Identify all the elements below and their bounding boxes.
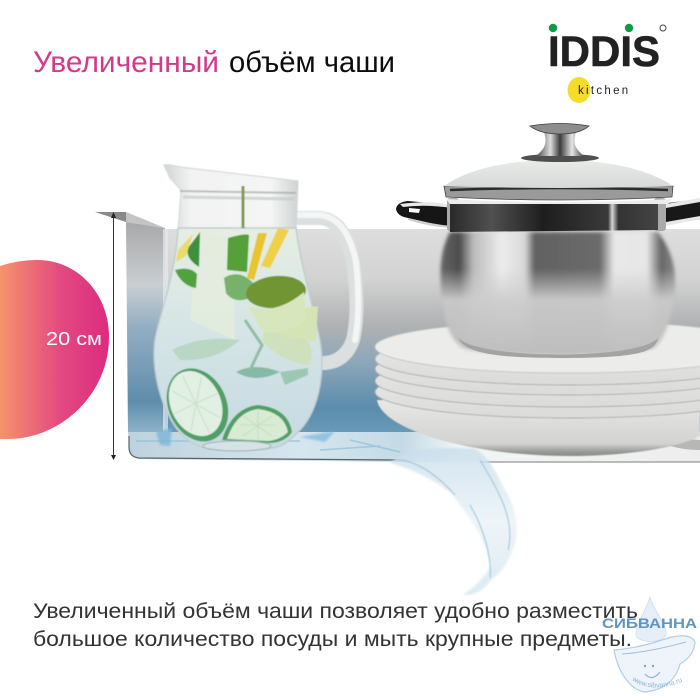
green leaves — [175, 232, 255, 300]
dark band — [450, 204, 658, 232]
body text: Увеличенный объём чаши позволяет удобно разместить — [33, 599, 638, 623]
depth arrow — [111, 212, 116, 460]
steel pot with glass lid — [396, 124, 700, 358]
depth label: 20 см — [46, 329, 102, 349]
right floor highlight — [480, 440, 700, 463]
water stream — [390, 448, 517, 595]
sink floor — [128, 432, 700, 462]
sink back wall — [165, 229, 700, 433]
pot body — [441, 232, 675, 355]
lid knob — [521, 124, 599, 162]
left handle — [396, 198, 459, 231]
pitcher handle — [296, 218, 356, 363]
watermark: Sibvanna — [602, 596, 697, 693]
watermark url: www.sibvanna.ru — [633, 677, 682, 688]
sink left wall — [126, 222, 165, 433]
pitcher base — [203, 441, 271, 451]
stem — [242, 186, 244, 228]
lid rim — [444, 186, 673, 200]
sink top flange — [95, 212, 126, 222]
body text: большое количество посуды и мыть крупные предметы. — [33, 627, 632, 651]
body text — [33, 599, 638, 651]
pale leaves — [172, 230, 318, 385]
glass lid dome — [444, 160, 673, 188]
pitcher neck and rim — [164, 165, 298, 232]
title: Увеличенный — [33, 46, 219, 79]
right handle — [654, 198, 700, 231]
sink basin — [95, 212, 700, 463]
stack of plates — [375, 321, 700, 456]
logo: IDDIS kitchen — [548, 24, 666, 103]
pink gradient blob — [0, 260, 109, 439]
title — [33, 46, 395, 79]
bottom bowl — [377, 400, 700, 456]
logo: IDDIS kitchen: IDDIS — [548, 28, 660, 76]
pitcher body — [154, 228, 322, 449]
lemon slices — [176, 228, 289, 280]
pitcher with lime water — [154, 165, 358, 452]
lime slice right — [222, 405, 292, 443]
logo: IDDIS kitchen: kitchen — [578, 85, 630, 97]
title: объём чаши — [229, 46, 395, 79]
lime half — [245, 273, 307, 311]
lime slice left — [155, 358, 240, 452]
water drop — [636, 597, 666, 642]
watermark name: СИБВАННА — [602, 615, 697, 631]
pot base — [458, 338, 658, 358]
bathtub mascot — [614, 636, 695, 692]
plates — [375, 321, 700, 418]
